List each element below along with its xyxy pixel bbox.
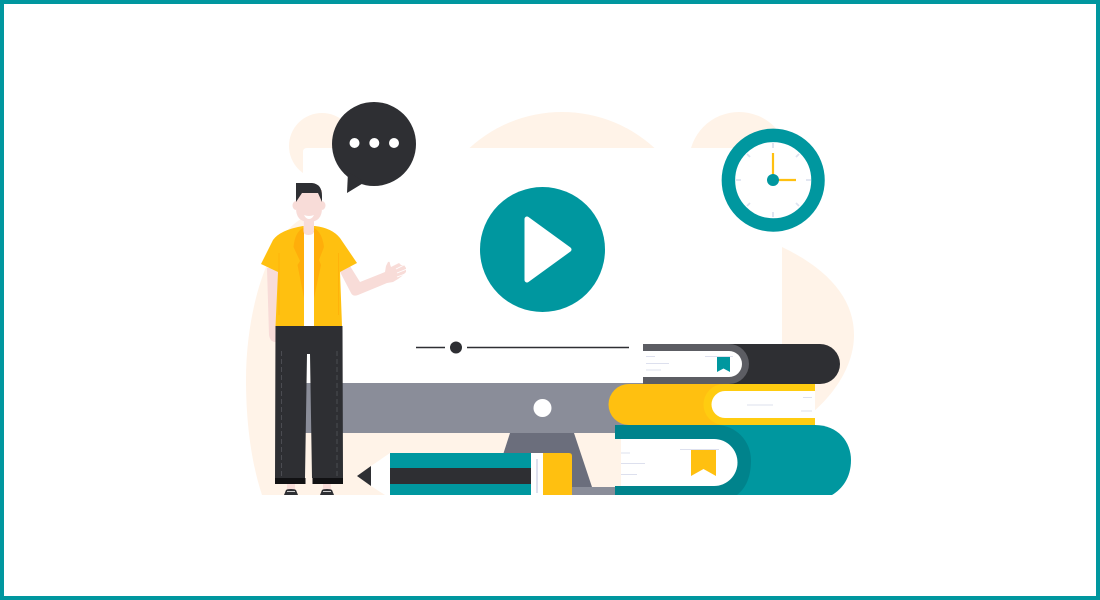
monitor right side cover xyxy=(643,340,782,384)
monitor screen xyxy=(303,148,782,383)
person xyxy=(261,183,407,495)
pencil xyxy=(357,453,572,495)
hair xyxy=(296,183,322,202)
shoes xyxy=(284,489,334,495)
right arm and hand xyxy=(338,262,406,296)
trousers xyxy=(275,326,343,478)
trouser stitching xyxy=(282,351,337,477)
smile xyxy=(304,215,314,219)
pencil eraser xyxy=(543,453,572,495)
pencil body teal xyxy=(390,453,531,495)
shirt lapels xyxy=(294,228,324,298)
monitor bezel xyxy=(305,383,643,433)
peach background blobs xyxy=(246,112,854,495)
left arm xyxy=(267,268,279,342)
ears xyxy=(293,201,326,210)
pencil wood xyxy=(371,453,390,495)
pencil ferrule xyxy=(531,453,543,495)
ankles xyxy=(287,484,331,492)
shirt fold lines xyxy=(279,253,338,315)
bottom teal book xyxy=(615,425,851,495)
pencil tip xyxy=(357,466,371,486)
stack of books xyxy=(608,344,851,495)
middle yellow book xyxy=(608,384,815,425)
trouser cuffs xyxy=(275,478,343,484)
undershirt xyxy=(304,232,314,326)
shirt xyxy=(261,226,357,326)
finger gaps xyxy=(396,264,407,277)
video progress bar xyxy=(416,342,629,354)
head xyxy=(296,190,322,222)
neck xyxy=(304,218,314,235)
icon: speech bubble xyxy=(332,102,416,193)
icon: play button xyxy=(480,187,605,312)
monitor xyxy=(303,148,782,495)
monitor stand base xyxy=(572,487,615,495)
pencil ferrule line xyxy=(536,459,538,493)
icon: clock xyxy=(728,135,818,225)
monitor power button xyxy=(534,399,552,417)
pencil body dark stripe xyxy=(390,468,531,484)
top black book xyxy=(643,344,840,384)
monitor stand xyxy=(490,433,592,495)
